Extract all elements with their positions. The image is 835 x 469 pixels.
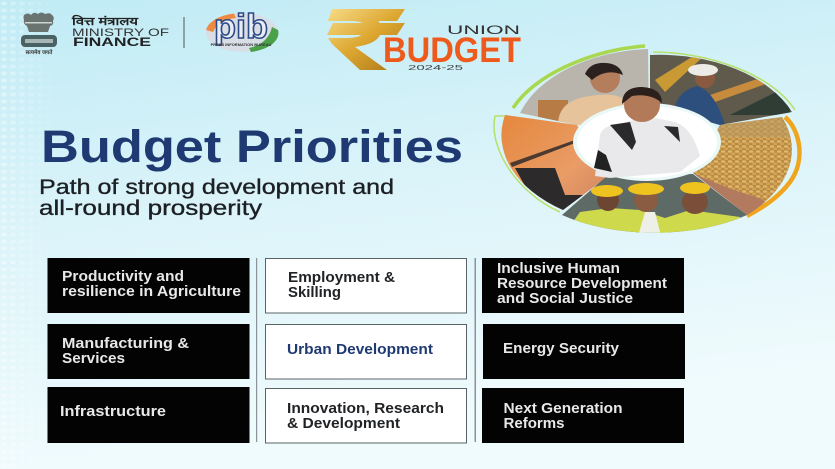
icon: national emblem: सत्यमेव जयते bbox=[25, 48, 53, 56]
panel: Manufacturing and Services: Manufacturing & bbox=[62, 335, 189, 352]
title: Budget Priorities bbox=[41, 121, 463, 172]
ministry of: MINISTRY OF bbox=[72, 27, 169, 39]
panel: Infrastructure: Infrastructure bbox=[60, 403, 166, 420]
column dividers bbox=[256, 258, 476, 442]
panel: Manufacturing and Services bbox=[48, 324, 250, 379]
panel: Inclusive Human Resource Development and Social Justice: and Social Justice bbox=[497, 290, 633, 307]
panel: Productivity and resilience in Agriculture bbox=[48, 258, 250, 313]
panel: Urban Development bbox=[266, 324, 466, 379]
panel: Innovation, Research and Development: & Development bbox=[287, 415, 400, 432]
panel: Next Generation Reforms bbox=[482, 388, 684, 443]
photo wheel bbox=[494, 45, 800, 240]
icon: PIB logo: PRESS INFORMATION BUREAU bbox=[211, 42, 272, 47]
photo: workers bbox=[562, 174, 747, 233]
photo: engineer bbox=[650, 54, 792, 125]
Union Budget logo bbox=[327, 9, 521, 72]
panel: Productivity and resilience in Agriculture: Productivity and bbox=[62, 268, 184, 285]
panel: Productivity and resilience in Agriculture: resilience in Agriculture bbox=[62, 283, 241, 300]
panel: Employment and Skilling: Employment & bbox=[288, 269, 395, 286]
subtitle bbox=[39, 176, 394, 220]
budget: BUDGET bbox=[383, 31, 521, 70]
panel: Innovation, Research and Development bbox=[266, 388, 466, 443]
ministry hindi name: वित्त मंत्रालय bbox=[71, 14, 139, 28]
panel: Inclusive Human Resource Development and Social Justice: Resource Development bbox=[497, 275, 667, 292]
year: 2024-25 bbox=[408, 65, 463, 72]
panel: Energy Security bbox=[483, 324, 685, 379]
subtitle: Path of strong development and bbox=[39, 176, 394, 199]
panel: Infrastructure bbox=[48, 387, 250, 443]
photo: sunset construction bbox=[501, 115, 606, 210]
panel: Employment and Skilling bbox=[266, 258, 466, 313]
panel: Next Generation Reforms: Reforms bbox=[504, 415, 564, 432]
arc: light green top-right bbox=[653, 52, 795, 110]
finance: FINANCE bbox=[73, 37, 151, 49]
icon: PIB logo: pib bbox=[214, 8, 268, 46]
icon: national emblem bbox=[21, 12, 57, 56]
panel: Manufacturing and Services: Services bbox=[62, 350, 125, 367]
union: UNION bbox=[447, 23, 520, 37]
panel: Next Generation Reforms: Next Generation bbox=[504, 400, 622, 417]
priorities grid bbox=[48, 258, 685, 443]
panel: Inclusive Human Resource Development and Social Justice: Inclusive Human bbox=[497, 260, 620, 277]
panel: Employment and Skilling: Skilling bbox=[288, 284, 341, 301]
photo: woman bbox=[520, 49, 648, 125]
panel: Inclusive Human Resource Development and Social Justice bbox=[482, 258, 684, 313]
arc: orange right bbox=[747, 117, 799, 216]
photo: wheat bbox=[693, 117, 792, 215]
header: Ministry of Finance logo bbox=[21, 12, 169, 56]
arc: light green left bbox=[494, 116, 560, 212]
subtitle: all-round prosperity bbox=[39, 197, 263, 220]
panel: Urban Development: Urban Development bbox=[287, 341, 433, 358]
divider bbox=[184, 17, 185, 48]
panel: Energy Security: Energy Security bbox=[503, 340, 620, 357]
icon: rupee symbol bbox=[327, 9, 405, 70]
arc: green top-left bbox=[513, 46, 645, 108]
center circle with student bbox=[573, 87, 721, 181]
icon: PIB logo bbox=[206, 8, 278, 52]
panel: Innovation, Research and Development: Innovation, Research bbox=[287, 400, 444, 417]
